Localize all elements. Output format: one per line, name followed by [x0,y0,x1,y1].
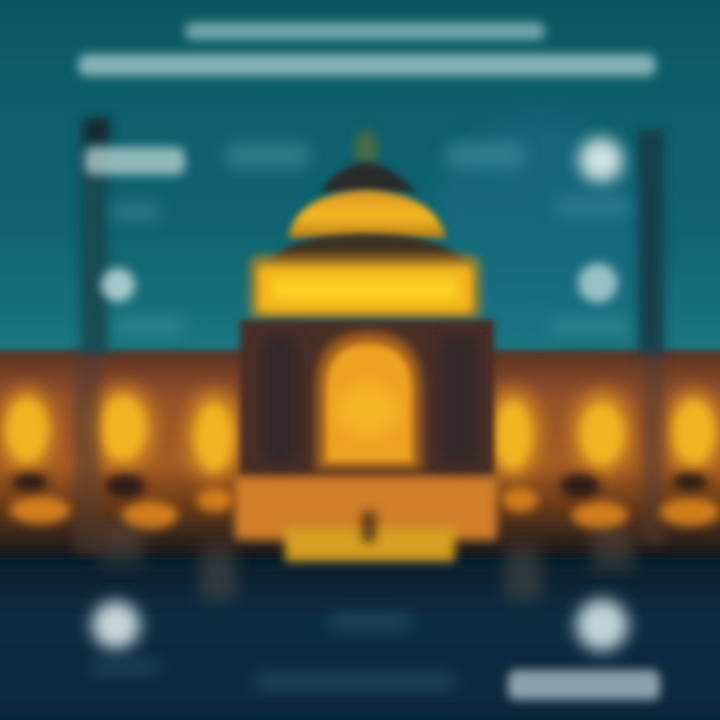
upper centre faint labels [225,142,525,168]
main yellow band [258,266,472,312]
arch block shading [262,335,478,465]
finial [354,130,378,166]
icon: middle right circle [578,263,618,303]
upper left label [85,147,185,175]
reflecting pool [0,525,720,720]
lit base and steps [10,473,720,564]
lower faint captions [90,613,455,691]
arch block [240,320,494,476]
lower right label [508,670,660,700]
central arch [326,344,412,462]
left and right towers [74,118,664,555]
faint side captions [110,198,630,334]
central arch glow [316,332,422,470]
lit windows: right [483,387,720,479]
domed monument [240,130,494,476]
colonnade wall [0,352,720,557]
icon: lower left circle [92,601,140,649]
upper yellow tier [288,190,446,238]
dome cap [320,162,416,192]
icon: upper right circle [579,138,623,182]
sky glow [430,120,650,340]
icon: middle left circle [101,268,135,302]
yellow band glow [250,256,480,320]
lit windows: left [0,384,244,481]
icon: lower right circle [576,599,628,651]
dark band [268,234,468,264]
title (illegible in reference) [78,22,656,76]
